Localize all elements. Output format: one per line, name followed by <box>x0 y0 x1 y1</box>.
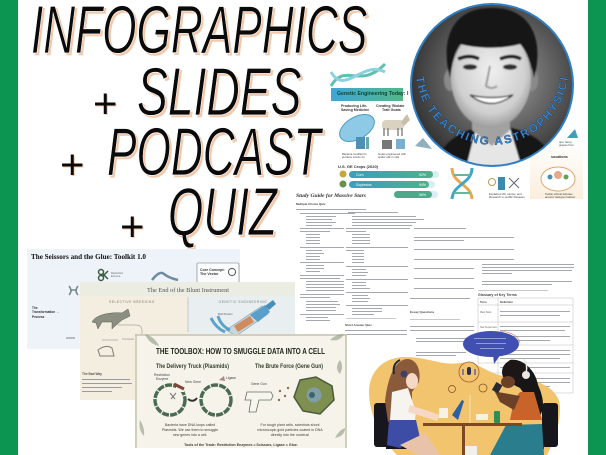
illustration: podcast listeners <box>369 331 560 455</box>
heading: glossary: Glossary of Key Terms <box>478 293 517 297</box>
heading: study guide: Study Guide for Massive Stars <box>296 193 366 199</box>
title: + <box>93 80 118 126</box>
icon: scientist: Research in prolific diseases <box>489 195 525 199</box>
title: QUIZ <box>170 177 280 252</box>
label: transformation process: The <box>32 306 38 310</box>
title: + <box>120 202 145 250</box>
panel: genetic engineering infographic <box>331 64 583 200</box>
icon: plasmid capsule: Producing Life- <box>341 104 368 108</box>
table and items <box>423 395 522 455</box>
panel: genetic engineering infographic: Bacteria modified to <box>342 152 367 156</box>
icon: blue DNA <box>211 316 230 332</box>
chart: U.S. GE crops bars: 92% <box>419 173 426 177</box>
slide: the seissors and the glue: The Seissors and the Glue: Toolkit 1.0 <box>31 252 146 261</box>
chart: U.S. GE crops bars: Soybeans <box>356 183 372 187</box>
icon: scientist: Explained 3D, cancer, and <box>489 192 522 196</box>
title: + <box>60 140 85 188</box>
icon: ligase ribbon <box>152 273 178 280</box>
title: PODCAST <box>109 117 326 192</box>
glossary table: Term <box>480 300 487 304</box>
title <box>31 0 369 252</box>
plasmid diagram: New Gene <box>185 380 201 384</box>
plasmid diagram: Restriction <box>154 373 170 377</box>
banner: Genetic Engineering Today: Genetic Engineering Today: I <box>337 91 409 97</box>
photo: presenter portrait <box>410 3 574 167</box>
slide: the toolbox: The Brute Force (Gene Gun) <box>255 363 323 370</box>
slide: the toolbox: Bacteria have DNA loops called <box>165 423 215 427</box>
slide: the toolbox: microscopic gold particles coated in DNA <box>257 428 323 432</box>
icon: scientist <box>488 177 525 199</box>
slide: the toolbox: directly into the nucleus! <box>271 433 309 437</box>
gene gun and plant cell: Gene Gun <box>251 382 267 386</box>
title: PODCAST <box>107 115 324 190</box>
icon: scissors <box>98 270 108 280</box>
panel: genetic engineering infographic: spider silk in milk <box>378 155 400 159</box>
slide: the end of the blunt instrument: The Bad Way <box>82 372 102 376</box>
slide: the toolbox: THE TOOLBOX: HOW TO SMUGGLE DATA INTO A CELL <box>156 346 325 356</box>
slide: the toolbox: Tools of the Trade: Restriction Enzymes = Scissors, Ligase = Glue. <box>184 443 298 447</box>
icon: ethics cloud: Tackle ethical debates <box>545 192 573 196</box>
icon: microphone <box>459 362 479 382</box>
woman left <box>385 359 448 455</box>
slide: the toolbox: The Delivery Truck (Plasmids) <box>156 363 229 370</box>
icon: wolf <box>92 309 130 329</box>
chart: U.S. GE crops bars: 96% <box>419 193 426 197</box>
speech bubble <box>463 331 520 364</box>
title: + <box>94 80 119 128</box>
label: transformation process <box>32 306 59 319</box>
chart: U.S. GE crops bars <box>338 164 439 198</box>
slide: the end of the blunt instrument: The End of the Blunt Instrument <box>147 287 229 294</box>
callout: core concept: Core Concept: <box>200 268 225 272</box>
title: QUIZ <box>168 175 278 250</box>
icon: goat <box>376 104 410 149</box>
title: + <box>61 142 86 188</box>
slide: the end of the blunt instrument: Bolt Protein <box>218 312 233 316</box>
heading: short answer: Short Answer Quiz <box>345 323 372 327</box>
slide: the toolbox <box>135 334 347 448</box>
slide: the toolbox: new genes into a cell. <box>173 433 207 437</box>
icon: ethics cloud: around 'designer babies' <box>545 195 576 199</box>
gene gun and plant cell <box>245 377 334 414</box>
chart: U.S. GE crops bars: 94% <box>419 183 426 187</box>
quiz text columns <box>296 209 574 356</box>
slide: the toolbox: For tough plant cells, scientists shoot <box>261 423 319 427</box>
panel: genetic engineering infographic: produce insulin for <box>342 155 365 159</box>
callout: core concept: The Vector <box>200 272 219 276</box>
icon: goat: Creating 'Biolate <box>376 104 404 108</box>
title: + <box>121 204 146 250</box>
slide: the end of the blunt instrument: Thousands <box>122 338 135 341</box>
slide: the seissors and the glue: Enzyme <box>111 274 121 278</box>
slide: the toolbox: Plasmids. We use them to smuggle <box>162 428 218 432</box>
plasmid diagram: Ligase <box>226 376 236 380</box>
slide: the end of the blunt instrument: GENETIC ENGINEERING <box>219 300 267 304</box>
flow outline <box>102 325 142 340</box>
slide: the seissors and the glue <box>27 249 240 349</box>
panel: genetic engineering infographic: socations <box>551 155 568 159</box>
panel: genetic engineering infographic: ops; fancy <box>559 140 572 144</box>
icon: syringe <box>226 300 276 336</box>
glossary table: Definition <box>500 300 513 304</box>
panel: genetic engineering infographic: grapes from <box>559 143 575 147</box>
icon: large DNA helix <box>452 168 472 200</box>
panel: study guide document <box>292 191 588 393</box>
label: transformation process: Transformation → <box>32 310 59 314</box>
icon: ethics cloud <box>541 167 576 199</box>
woman right <box>490 359 544 455</box>
plasmid diagram: Enzyme <box>156 377 168 381</box>
panel: genetic engineering infographic: Goats engineered with <box>378 152 406 156</box>
chart: U.S. GE crops bars: U.S. GE Crops (2020) <box>338 164 379 169</box>
title: SLIDES <box>139 56 304 132</box>
banner: Genetic Engineering Today <box>331 88 409 101</box>
icon: goat: Trait Goats <box>382 108 401 112</box>
icon: dna fragment <box>69 286 78 295</box>
slide: the end of the blunt instrument <box>80 282 295 400</box>
icon: plasmid capsule <box>335 104 379 149</box>
panel: study guide document: Multiple Choice Quiz <box>296 202 326 206</box>
title: SLIDES <box>137 54 302 130</box>
decorative leaves <box>140 334 345 438</box>
glossary table: Main Stars <box>480 311 492 314</box>
chart: U.S. GE crops bars: Corn <box>356 173 364 177</box>
label: transformation process: Process <box>32 315 45 319</box>
slide: the seissors and the glue: Restriction <box>111 271 124 275</box>
callout: core concept <box>197 263 239 285</box>
glossary table: Star Supernova <box>480 326 497 329</box>
icon: plasmid capsule: Saving Medicine <box>341 108 369 112</box>
chairs <box>374 403 558 449</box>
glossary table <box>478 298 573 393</box>
plasmid diagram <box>154 373 236 415</box>
icon: small dog <box>98 346 114 356</box>
icon: DNA helix <box>331 64 385 86</box>
slide: the end of the blunt instrument: SELECTIVE BREEDING <box>109 300 155 304</box>
heading: essay questions: Essay Questions <box>410 310 435 314</box>
